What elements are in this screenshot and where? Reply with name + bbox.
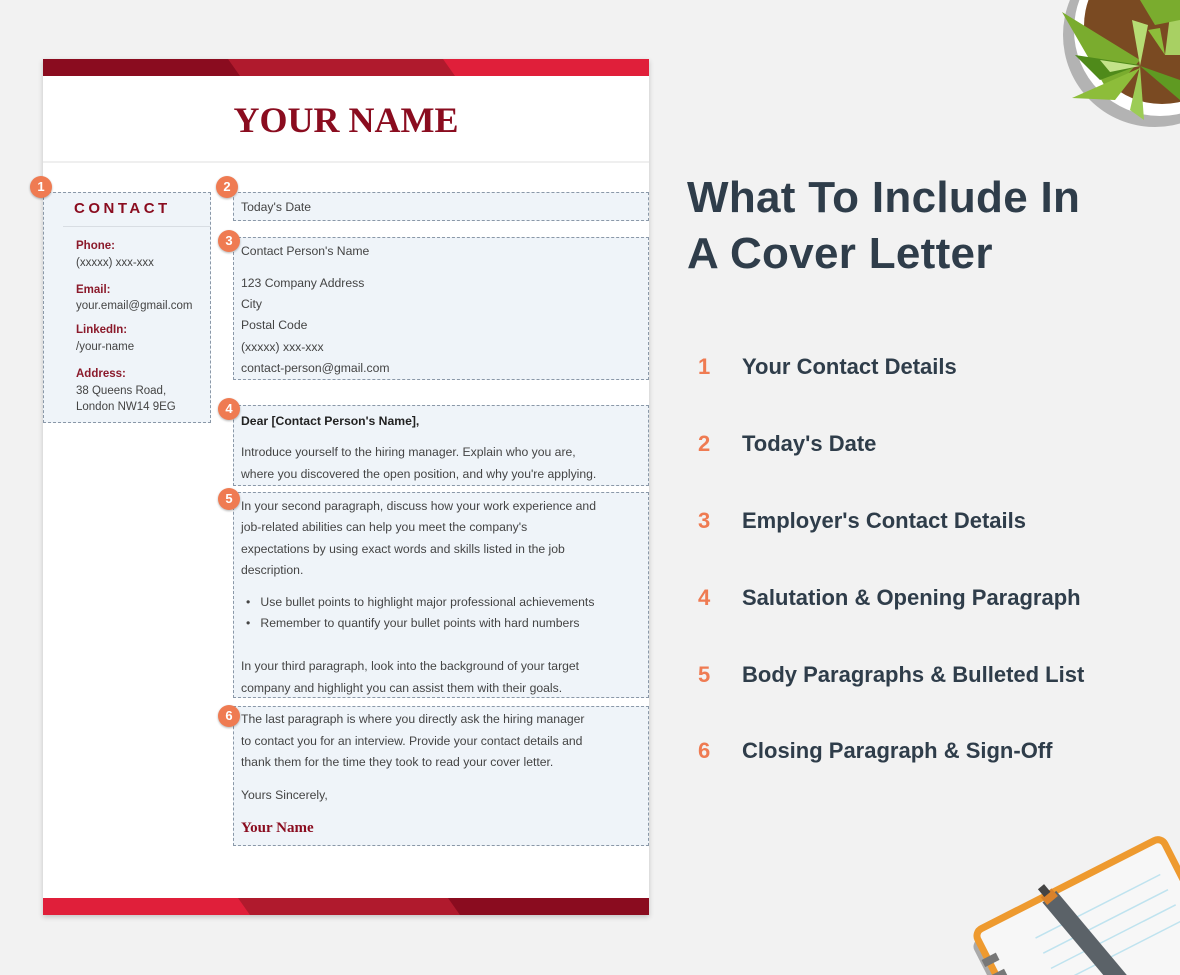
- list: Salutation & Opening Paragraph: [742, 585, 1081, 610]
- list: 5: [698, 662, 710, 687]
- top color bar: [43, 59, 649, 76]
- title: [687, 173, 1080, 278]
- panel 3: employer contact: Postal Code: [241, 318, 307, 332]
- panel 6: closing: Your Name: [241, 820, 314, 836]
- panel 1: contact: Address:: [76, 368, 126, 380]
- panel 2: date: Today's Date: [241, 200, 311, 214]
- list: Body Paragraphs & Bulleted List: [742, 662, 1084, 687]
- cover letter page: [43, 59, 649, 915]
- panel 5: body: In your third paragraph, look into the background of your target: [241, 659, 579, 673]
- list: 1: [698, 354, 710, 379]
- title: A Cover Letter: [687, 229, 993, 278]
- panel 1: contact: LinkedIn:: [76, 324, 127, 336]
- panel 5: body: In your second paragraph, discuss how your work experience and: [241, 499, 596, 513]
- name heading: YOUR NAME: [234, 100, 458, 140]
- panel 5: body: • Use bullet points to highlight major professional achievements: [246, 595, 594, 609]
- panel 5: body: expectations by using exact words and skills listed in the job: [241, 542, 565, 556]
- panel 1: contact: (xxxxx) xxx-xxx: [76, 257, 154, 269]
- bottom color bar: [43, 898, 649, 915]
- panel 5: body: • Remember to quantify your bullet points with hard numbers: [246, 616, 580, 630]
- panel 6: closing: to contact you for an interview. Provide your contact details and: [241, 734, 582, 748]
- panel 4: salutation: Introduce yourself to the hiring manager. Explain who you are,: [241, 445, 576, 459]
- panel 6: closing: thank them for the time they took to read your cover letter.: [241, 755, 553, 769]
- panel 1: contact: Phone:: [76, 240, 115, 252]
- list: 3: [698, 508, 710, 533]
- list: 4: [698, 585, 710, 610]
- list: Closing Paragraph & Sign-Off: [742, 738, 1052, 763]
- panel 3: employer contact: [233, 237, 649, 380]
- panel 1: contact: Email:: [76, 284, 111, 296]
- list: Today's Date: [742, 431, 876, 456]
- panel 5: body: description.: [241, 563, 303, 577]
- text: 6: [225, 708, 233, 723]
- panel 6: closing: The last paragraph is where you directly ask the hiring manager: [241, 712, 584, 726]
- panel 1: contact: [43, 192, 211, 423]
- list: Employer's Contact Details: [742, 508, 1026, 533]
- panel 1: contact: /your-name: [76, 341, 134, 353]
- panel 3: employer contact: (xxxxx) xxx-xxx: [241, 340, 324, 354]
- list: Your Contact Details: [742, 354, 957, 379]
- list: [698, 354, 1084, 763]
- decoration: notebook and pen: [973, 836, 1180, 975]
- panel 3: employer contact: Contact Person's Name: [241, 244, 369, 258]
- list: 6: [698, 738, 710, 763]
- decoration: plant: [1062, 0, 1180, 127]
- badges: 1: [37, 179, 45, 194]
- panel 5: body: company and highlight you can assist them with their goals.: [241, 681, 562, 695]
- panel 1: contact: CONTACT: [74, 200, 171, 217]
- panel 4: salutation: Dear [Contact Person's Name],: [241, 414, 419, 428]
- panel 1: contact: London NW14 9EG: [76, 401, 176, 413]
- panel 3: employer contact: City: [241, 297, 262, 311]
- panel 4: salutation: [233, 405, 649, 486]
- panel 3: employer contact: contact-person@gmail.com: [241, 361, 390, 375]
- panel 6: closing: Yours Sincerely,: [241, 788, 328, 802]
- title: What To Include In: [687, 173, 1080, 222]
- panel 6: closing: [233, 706, 649, 846]
- text: 3: [225, 233, 233, 248]
- text: 5: [225, 491, 233, 506]
- badges: [30, 176, 52, 198]
- panel 5: body: [233, 492, 649, 698]
- text: 4: [225, 401, 233, 416]
- panel 4: salutation: where you discovered the open position, and why you're applying.: [241, 467, 596, 481]
- panel 5: body: job-related abilities can help you meet the company's: [241, 520, 527, 534]
- panel 2: date: [233, 192, 649, 221]
- panel 1: contact: 38 Queens Road,: [76, 385, 166, 397]
- panel 3: employer contact: 123 Company Address: [241, 276, 364, 290]
- text: 2: [223, 179, 231, 194]
- list: 2: [698, 431, 710, 456]
- panel 1: contact: your.email@gmail.com: [76, 300, 192, 312]
